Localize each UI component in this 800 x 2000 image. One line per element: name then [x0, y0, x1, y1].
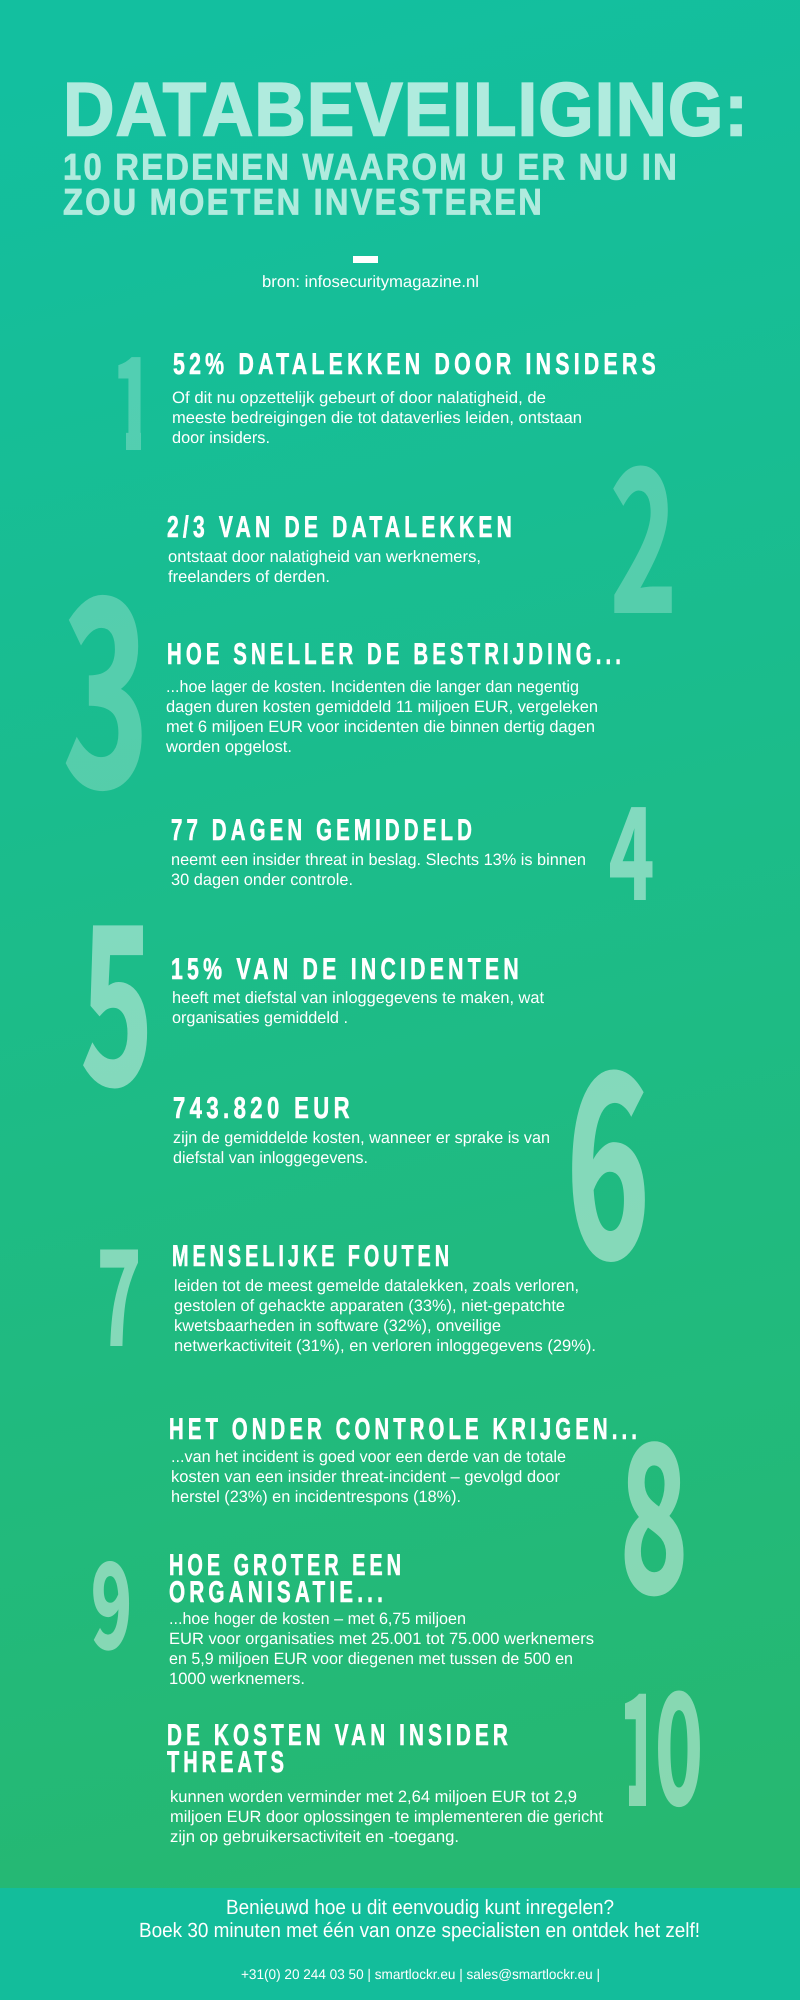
- body 1: Of dit nu opzettelijk gebeurt of door nalatigheid, de: [172, 389, 546, 407]
- heading 9: ORGANISATIE...: [169, 1576, 387, 1609]
- body 7: netwerkactiviteit (31%), en verloren inloggegevens (29%).: [174, 1337, 596, 1355]
- body 8: herstel (23%) en incidentrespons (18%).: [171, 1488, 461, 1506]
- heading 5: 15% VAN DE INCIDENTEN: [171, 953, 523, 986]
- subtitle: 10 REDENEN WAAROM U ER NU IN: [63, 146, 679, 188]
- heading 4: 77 DAGEN GEMIDDELD: [171, 814, 476, 847]
- number 8: 8: [620, 1358, 688, 1651]
- body 3: worden opgelost.: [165, 738, 292, 756]
- footer band: [0, 1888, 800, 2000]
- heading 9: [169, 1549, 405, 1609]
- subtitle: ZOU MOETEN INVESTEREN: [63, 182, 544, 222]
- body 3: [165, 678, 598, 756]
- body 2: ontstaat door nalatigheid van werknemers,: [168, 548, 481, 566]
- body 10: [170, 1788, 603, 1846]
- number 4: 4: [609, 754, 654, 936]
- number 10: 1: [617, 1629, 664, 1850]
- heading 6: 743.820 EUR: [173, 1092, 354, 1125]
- body 9: EUR voor organisaties met 25.001 tot 75.000 werknemers: [169, 1630, 594, 1648]
- body 7: leiden tot de meest gemelde datalekken, zoals verloren,: [174, 1277, 579, 1295]
- call to action: Benieuwd hoe u dit eenvoudig kunt inregelen?: [226, 1896, 614, 1919]
- title block: [63, 68, 749, 222]
- body 7: [174, 1277, 596, 1355]
- body 10: miljoen EUR door oplossingen te implementeren die gericht: [170, 1808, 603, 1826]
- heading 2: 2/3 VAN DE DATALEKKEN: [167, 511, 516, 544]
- body 9: 1000 werknemers.: [169, 1670, 305, 1688]
- item 5: [81, 831, 544, 1147]
- heading 10: DE KOSTEN VAN INSIDER: [167, 1719, 512, 1752]
- number 1: 1: [111, 304, 155, 486]
- main title: DATABEVEILIGING:: [63, 68, 749, 152]
- body 6: [173, 1129, 550, 1167]
- body 3: ...hoe lager de kosten. Incidenten die langer dan negentig: [166, 678, 579, 696]
- number 2: 2: [610, 383, 677, 670]
- body 2: freelanders of derden.: [168, 568, 330, 586]
- body 10: zijn op gebruikersactiviteit en -toegang.: [170, 1828, 459, 1846]
- item 8: [169, 1358, 688, 1651]
- body 2: [168, 548, 481, 586]
- body 7: gestolen of gehackte apparaten (33%), niet-gepatchte: [174, 1297, 565, 1315]
- item 1: [111, 304, 660, 486]
- call to action: Boek 30 minuten met één van onze specialisten en ontdek het zelf!: [139, 1919, 700, 1942]
- number 10: [625, 1690, 700, 1808]
- subtitle: [63, 146, 679, 222]
- item 7: [97, 1193, 596, 1383]
- dash divider: [353, 256, 378, 263]
- body 5: [172, 989, 544, 1027]
- number 9: 9: [91, 1512, 132, 1682]
- heading 10: THREATS: [167, 1746, 288, 1779]
- contact line: +31(0) 20 244 03 50 | smartlockr.eu | sales@smartlockr.eu |: [241, 1966, 600, 1982]
- heading 7: MENSELIJKE FOUTEN: [172, 1240, 453, 1273]
- body 8: kosten van een insider threat-incident – gevolgd door: [171, 1468, 561, 1486]
- body 1: door insiders.: [172, 429, 270, 447]
- body 3: dagen duren kosten gemiddeld 11 miljoen EUR, vergeleken: [166, 698, 598, 716]
- body 1: [172, 389, 582, 447]
- number 3: 3: [63, 488, 149, 861]
- source line: bron: infosecuritymagazine.nl: [262, 273, 479, 291]
- call to action: [139, 1896, 700, 1942]
- item 4: [171, 754, 654, 936]
- body 4: neemt een insider threat in beslag. Slechts 13% is binnen: [171, 851, 586, 869]
- body 9: [169, 1610, 594, 1688]
- body 9: ...hoe hoger de kosten – met 6,75 miljoen: [169, 1610, 466, 1628]
- body 5: organisaties gemiddeld .: [172, 1009, 348, 1027]
- body 8: ...van het incident is goed voor een derde van de totale: [171, 1448, 566, 1466]
- item 6: [173, 964, 650, 1330]
- heading 10: [167, 1719, 512, 1779]
- item 2: [167, 383, 677, 670]
- body 7: kwetsbaarheden in software (32%), onveilige: [174, 1317, 501, 1335]
- number 6: 6: [566, 964, 650, 1330]
- number 7: 7: [97, 1193, 141, 1383]
- body 5: heeft met diefstal van inloggegevens te maken, wat: [172, 989, 544, 1007]
- body 8: [171, 1448, 566, 1506]
- item 9: [91, 1512, 594, 1688]
- body 10: kunnen worden verminder met 2,64 miljoen EUR tot 2,9: [170, 1788, 577, 1806]
- heading 9: HOE GROTER EEN: [169, 1549, 405, 1582]
- body 4: 30 dagen onder controle.: [171, 871, 353, 889]
- body 3: met 6 miljoen EUR voor incidenten die binnen dertig dagen: [166, 718, 595, 736]
- number 5: 5: [81, 831, 153, 1147]
- number 10: 0: [655, 1628, 703, 1849]
- body 1: meeste bedreigingen die tot dataverlies leiden, ontstaan: [172, 409, 582, 427]
- body 6: diefstal van inloggegevens.: [173, 1149, 368, 1167]
- body 6: zijn de gemiddelde kosten, wanneer er sprake is van: [173, 1129, 550, 1147]
- body 9: en 5,9 miljoen EUR voor diegenen met tussen de 500 en: [169, 1650, 573, 1668]
- item 3: [63, 488, 625, 861]
- item 10: [167, 1690, 700, 1846]
- body 4: [171, 851, 586, 889]
